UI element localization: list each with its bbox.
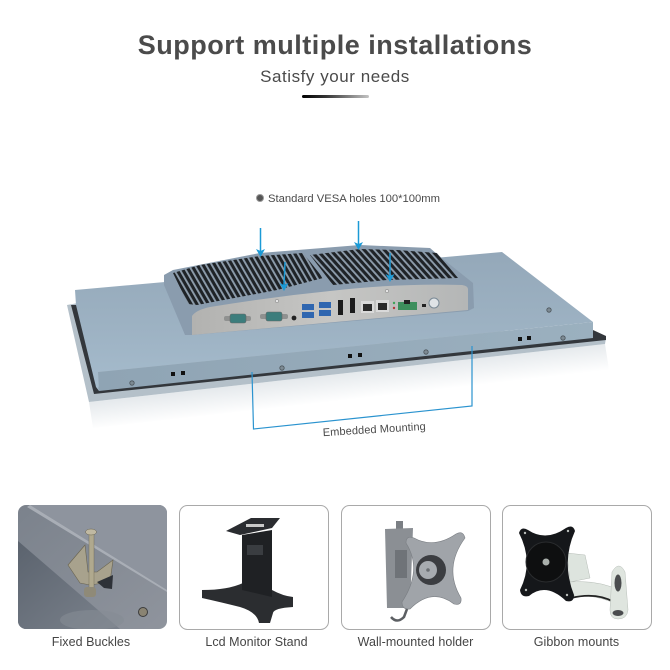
panel bezel <box>67 303 606 402</box>
plate mounting holes <box>524 530 569 596</box>
label: LCD monitor stand: Lcd Monitor Stand <box>205 635 308 649</box>
swing arm <box>567 553 628 619</box>
panel front face <box>98 322 593 391</box>
stand pillar <box>242 530 272 597</box>
mounting slots <box>171 336 531 376</box>
card: LCD monitor stand <box>180 506 328 630</box>
bezel gasket <box>71 305 606 394</box>
panel screw <box>138 608 148 616</box>
panel PC illustration <box>67 245 609 428</box>
VESA center recess <box>416 555 446 585</box>
card: gibbon mounts <box>502 506 652 630</box>
arrow: VESA hole 1 <box>256 228 265 257</box>
hook <box>391 609 407 620</box>
subtitle: Satisfy your needs <box>260 67 410 86</box>
plate recess <box>526 542 566 582</box>
label: wall-mounted holder: Wall-mounted holder <box>358 635 473 649</box>
arrow: VESA hole 2 <box>354 221 363 250</box>
label: gibbon mounts: Gibbon mounts <box>534 635 619 649</box>
panel screws <box>130 308 565 385</box>
stand tilt plate <box>226 518 280 535</box>
brushed IO plate <box>192 285 468 335</box>
heatsink fins left <box>173 253 323 305</box>
arrow: VESA hole 3 <box>280 262 288 291</box>
VESA star plate <box>402 533 465 609</box>
card: wall-mounted holder <box>342 506 490 630</box>
IO ports <box>224 298 439 323</box>
embedded mounting bracket <box>252 346 472 429</box>
buckle clamp <box>68 529 113 597</box>
title accent bar <box>302 95 369 98</box>
card: fixed buckles <box>18 505 167 630</box>
stand base <box>202 583 293 623</box>
computer chassis <box>164 245 474 335</box>
plate screws <box>275 289 389 303</box>
arrow: VESA hole 4 <box>386 253 394 282</box>
label: fixed buckles: Fixed Buckles <box>52 635 130 649</box>
VESA note: Standard VESA holes 100*100mm <box>268 193 440 205</box>
title: Support multiple installations <box>138 30 532 60</box>
wall bracket plate <box>385 521 413 608</box>
panel reflection <box>89 344 609 428</box>
panel top face <box>75 252 593 391</box>
heatsink fins right <box>310 249 458 285</box>
embedded mounting label: Embedded Mounting <box>322 421 426 439</box>
VESA black plate <box>519 527 575 601</box>
